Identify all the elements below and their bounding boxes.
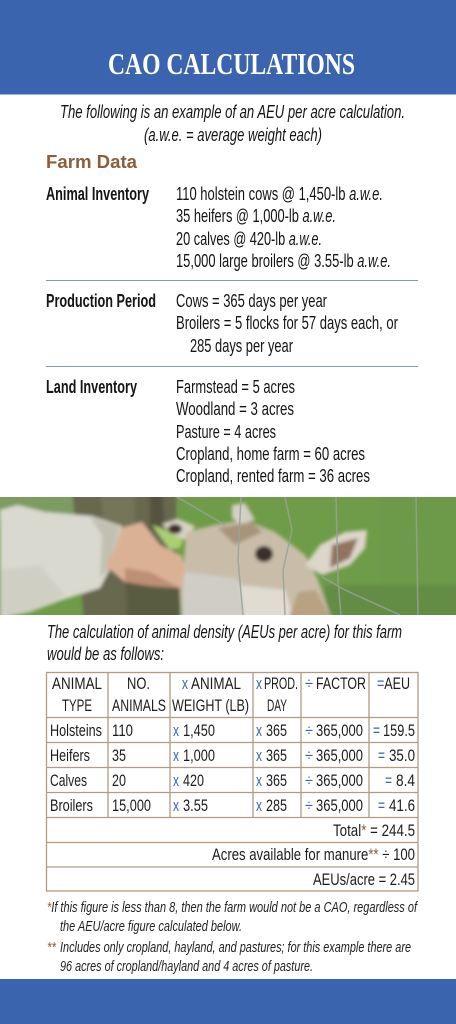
row: Heifers: 365	[266, 746, 287, 765]
row: Calves: 365	[266, 771, 287, 790]
row: Broilers: x	[256, 796, 262, 815]
row: Broilers: 3.55	[183, 796, 208, 815]
row: Heifers: 365,000	[316, 746, 363, 765]
row: acres available: Acres available for manure** ÷ 100	[212, 845, 415, 864]
table header row: TYPE	[62, 696, 92, 715]
row: total: Total* = 244.5	[333, 821, 415, 840]
block: land inventory	[46, 377, 370, 486]
footnotes: the AEU/acre figure calculated below.	[60, 919, 242, 935]
table header row: ANIMALS	[112, 696, 166, 715]
row: Broilers: ÷	[305, 796, 313, 815]
row: Calves: x	[173, 771, 179, 790]
row: Holsteins: 365,000	[316, 721, 363, 740]
header band	[0, 0, 456, 94]
row: Broilers	[50, 796, 415, 815]
row: Broilers: 365,000	[316, 796, 363, 815]
row: Holsteins: Holsteins	[50, 721, 102, 740]
table header row: x	[182, 674, 188, 693]
table header row: x	[256, 674, 262, 693]
block: land inventory: Woodland = 3 acres	[176, 399, 294, 419]
title: CAO CALCULATIONS	[108, 46, 355, 81]
block: animal inventory: 20 calves @ 420-lb a.w.e.	[176, 229, 322, 249]
table header row: DAY	[267, 696, 287, 715]
block: animal inventory	[46, 184, 391, 271]
block: land inventory: Land Inventory	[46, 377, 137, 397]
row: Heifers: =	[378, 746, 385, 765]
block: production period: Cows = 365 days per year	[176, 291, 327, 311]
row: Heifers: 35	[112, 746, 126, 765]
row: Holsteins: 365	[266, 721, 287, 740]
intro text	[60, 102, 405, 145]
table header row: ANIMAL	[52, 674, 102, 693]
calculation intro text	[47, 622, 402, 664]
row: Holsteins: x	[256, 721, 262, 740]
block: production period	[46, 291, 398, 356]
intro text: (a.w.e. = average weight each)	[144, 125, 322, 145]
row: Broilers: 15,000	[112, 796, 151, 815]
footnotes: **	[47, 940, 57, 956]
block: animal inventory: 35 heifers @ 1,000-lb a.w.e.	[176, 206, 336, 226]
block: land inventory: Farmstead = 5 acres	[176, 377, 295, 397]
row: AEUs per acre: AEUs/acre = 2.45	[313, 870, 415, 889]
table header row: =AEU	[377, 674, 410, 693]
row: Holsteins	[50, 721, 415, 740]
table header row: ANIMAL	[191, 674, 241, 693]
row: Holsteins: x	[173, 721, 179, 740]
block: production period: 285 days per year	[190, 336, 293, 356]
row: Broilers: x	[173, 796, 179, 815]
row: Calves: 20	[112, 771, 126, 790]
row: Holsteins: 1,450	[183, 721, 215, 740]
table: AEU calculation	[46, 672, 418, 891]
footer band	[0, 979, 456, 1024]
row: Calves: =	[385, 771, 392, 790]
block: land inventory: Cropland, rented farm = 36 acres	[176, 466, 370, 486]
table header row	[52, 674, 410, 715]
row: Broilers: 285	[266, 796, 287, 815]
block: animal inventory: 15,000 large broilers @ 3.55-lb a.w.e.	[176, 251, 391, 271]
row: Holsteins: 159.5	[383, 721, 415, 740]
table header row: FACTOR	[316, 674, 366, 693]
row: Heifers: 1,000	[183, 746, 215, 765]
row: Broilers: Broilers	[50, 796, 93, 815]
block: animal inventory: Animal Inventory	[46, 184, 149, 204]
block: land inventory: Pasture = 4 acres	[176, 422, 276, 442]
block: animal inventory: 110 holstein cows @ 1,450-lb a.w.e.	[176, 184, 383, 204]
row: Holsteins: ÷	[305, 721, 313, 740]
row: Heifers: Heifers	[50, 746, 90, 765]
row: Broilers: 41.6	[389, 796, 415, 815]
row: Broilers: =	[378, 796, 385, 815]
row: Heifers: 35.0	[389, 746, 415, 765]
row: Heifers: x	[173, 746, 179, 765]
row: Calves: 8.4	[396, 771, 415, 790]
row: Holsteins: =	[373, 721, 380, 740]
footnotes	[47, 900, 418, 975]
footnotes: 96 acres of cropland/hayland and 4 acres of pasture.	[60, 959, 313, 975]
table header row: ÷	[305, 674, 313, 693]
row: Calves: ÷	[305, 771, 313, 790]
table header row: WEIGHT (LB)	[172, 696, 249, 715]
calculation intro text: would be as follows:	[47, 644, 164, 664]
row: Calves: 420	[183, 771, 204, 790]
row: Calves: 365,000	[316, 771, 363, 790]
row: Holsteins: 110	[112, 721, 133, 740]
table header row: NO.	[127, 674, 150, 693]
row: Heifers: x	[256, 746, 262, 765]
table header row: PROD.	[264, 674, 298, 693]
block: land inventory: Cropland, home farm = 60 acres	[176, 444, 365, 464]
block: production period: Production Period	[46, 291, 156, 311]
row: Calves: Calves	[50, 771, 87, 790]
row: Calves: x	[256, 771, 262, 790]
row: Heifers	[50, 746, 415, 765]
heading: Farm Data: Farm Data	[46, 152, 138, 172]
photo: hand feeding a deer through a wire fence	[0, 490, 456, 620]
row: Calves	[50, 771, 415, 790]
row: Heifers: ÷	[305, 746, 313, 765]
